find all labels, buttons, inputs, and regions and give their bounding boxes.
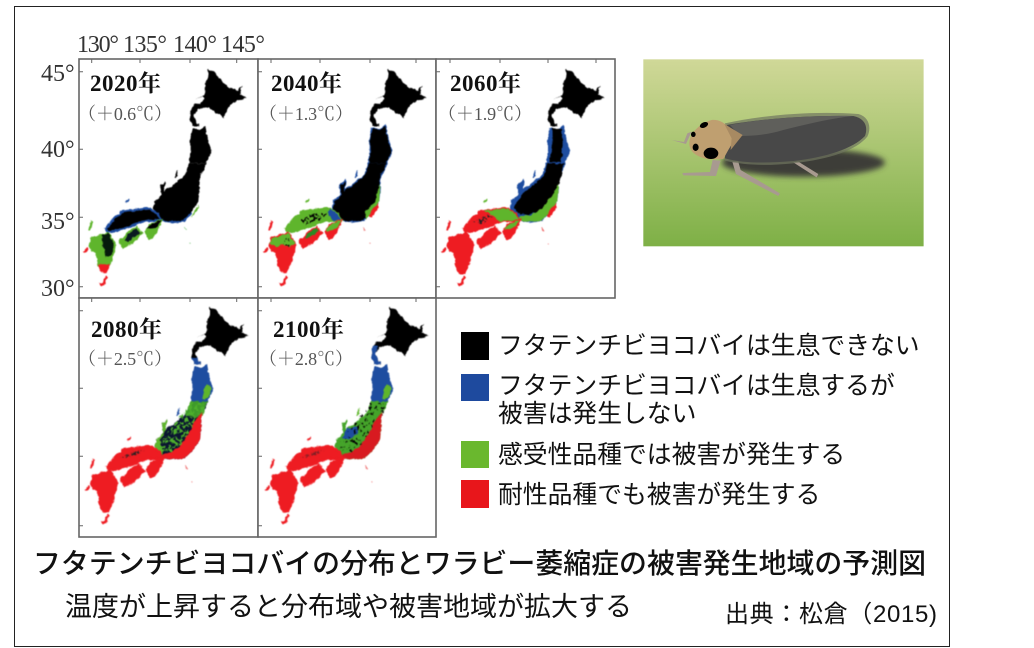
title: フタテンチビヨコバイの分布とワラビー萎縮症の被害発生地域の予測図 [33, 548, 926, 579]
latitude axis labels: 45° [41, 61, 75, 87]
panel: 2060 map [436, 59, 615, 298]
longitude axis labels: 140° [173, 32, 217, 58]
legend [461, 332, 920, 509]
panel: 2100 map [258, 298, 436, 537]
icon: wing [725, 113, 869, 165]
latitude axis labels: 35° [41, 209, 75, 235]
map: Japan 2060 [441, 68, 605, 286]
longitude axis labels: 145° [221, 32, 265, 58]
longitude axis labels: 130° [77, 32, 119, 58]
longitude axis labels [77, 32, 265, 58]
icon: head [689, 120, 738, 159]
icon: legs [672, 132, 818, 196]
map: Japan 2020 [83, 68, 247, 286]
year label 2020: 2020年 [90, 70, 161, 96]
subtitle: 温度が上昇すると分布域や被害地域が拡大する [65, 592, 632, 622]
year label 2040: 2040年 [271, 70, 342, 96]
icon: head spots [691, 121, 718, 159]
legend: green: 感受性品種では被害が発生する [498, 441, 845, 469]
temperature 2080: （＋2.5℃） [78, 349, 172, 369]
source: 出典：松倉（2015) [725, 601, 937, 628]
temperature 2040: （＋1.3℃） [259, 104, 353, 124]
map: Japan 2100 [264, 306, 428, 524]
legend: red: 耐性品種でも被害が発生する [498, 481, 820, 509]
year label 2060: 2060年 [450, 70, 521, 96]
panel: 2080 map [78, 298, 258, 537]
legend: blue [461, 372, 895, 428]
legend: blue: フタテンチビヨコバイは生息するが [498, 372, 895, 400]
latitude axis labels: 30° [41, 276, 75, 302]
map: Japan 2080 [84, 306, 248, 524]
map: Japan 2040 [263, 68, 427, 286]
illustration: leafhopper on green background [643, 59, 924, 246]
latitude axis labels: 40° [41, 137, 75, 163]
temperature 2060: （＋1.9℃） [438, 104, 532, 124]
legend: black: フタテンチビヨコバイは生息できない [498, 332, 920, 360]
icon: shadow [722, 149, 885, 177]
latitude axis labels [41, 61, 75, 302]
temperature 2100: （＋2.8℃） [259, 349, 353, 369]
year label 2100: 2100年 [273, 316, 344, 342]
year label 2080: 2080年 [91, 316, 162, 342]
longitude axis labels: 135° [123, 32, 167, 58]
legend: blue: 被害は発生しない [498, 400, 696, 428]
temperature 2020: （＋0.6℃） [78, 104, 172, 124]
panel: 2040 map [258, 59, 436, 298]
panel: 2020 map [78, 59, 258, 298]
